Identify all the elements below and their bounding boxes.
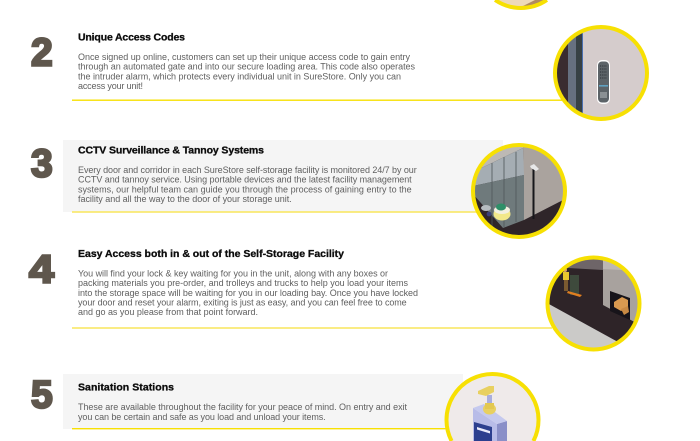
step number 4: 4 — [29, 248, 54, 292]
step number 3: 3 — [31, 142, 53, 186]
step number 5: 5 — [31, 374, 53, 416]
text block: step 5 description: These are available throughout the facility for your peace of mind. On entry and exit — [78, 402, 407, 412]
text block: step 3 description — [78, 165, 417, 204]
icon: loading bay circle — [547, 257, 640, 350]
panel: step 5 sanitation stations — [31, 374, 539, 441]
text block: step 4 description: packing materials you pre-order, and trolleys and trucks to help you load your items — [78, 278, 408, 288]
heading: unique access codes: Unique Access Codes — [78, 32, 185, 44]
icon: sanitiser bottle circle — [446, 374, 539, 441]
yellow underline — [72, 211, 492, 213]
icon: cctv corridor circle — [473, 145, 565, 237]
icon: door keypad circle — [555, 27, 647, 119]
heading: sanitation stations: Sanitation Stations — [78, 382, 174, 394]
grey panel background — [63, 374, 463, 429]
text block: step 5 description — [78, 402, 407, 422]
heading: easy access: Easy Access both in & out of the Self-Storage Facility — [78, 248, 344, 260]
yellow underline — [72, 100, 562, 101]
text block: step 2 description — [78, 52, 416, 91]
text block: step 2 description: the intruder alarm, which protects every individual unit in SureStore. Only you can — [78, 71, 401, 81]
yellow underline — [72, 327, 552, 329]
text block: step 4 description: and go as you please from that point forward. — [78, 307, 258, 317]
yellow underline — [72, 428, 452, 429]
grey panel background — [63, 140, 503, 212]
text block: step 2 description: Once signed up online, customers can set up their unique access code to gain entry — [78, 52, 410, 62]
text block: step 4 description — [78, 268, 418, 317]
text block: step 2 description: access your unit! — [78, 81, 143, 91]
icon: cropped circle from previous step — [494, 0, 548, 10]
text block: step 4 description: You will find your lock & key waiting for you in the unit, along with any boxes or — [78, 268, 388, 278]
text block: step 3 description: facility and all the way to the door of your storage unit. — [78, 194, 292, 204]
step number 2: 2 — [31, 32, 53, 74]
text block: step 3 description: Every door and corridor in each SureStore self-storage facility is monitored 24/7 by our — [78, 165, 417, 175]
text block: step 2 description: through an automated gate and into our secure loading area. This code also operates — [78, 62, 416, 72]
text block: step 3 description: CCTV and tannoy service. Using portable devices and the latest facility management — [78, 175, 412, 185]
panel: step 2 unique access codes — [31, 27, 647, 119]
panel: step 3 cctv surveillance — [31, 140, 565, 237]
text block: step 4 description: into the storage space will be waiting for you in our loading bay. Once you have locked — [78, 288, 418, 298]
heading: cctv surveillance and tannoy systems: CCTV Surveillance & Tannoy Systems — [78, 144, 264, 156]
panel: step 4 easy access — [29, 248, 640, 350]
text block: step 3 description: systems, our helpful team can guide you through the process of gaining entry to the — [78, 184, 412, 194]
text block: step 5 description: you can be certain and safe as you load and unload your items. — [78, 412, 326, 422]
text block: step 4 description: your door and reset your alarm, exiting is just as easy, and you can feel free to come — [78, 298, 407, 308]
